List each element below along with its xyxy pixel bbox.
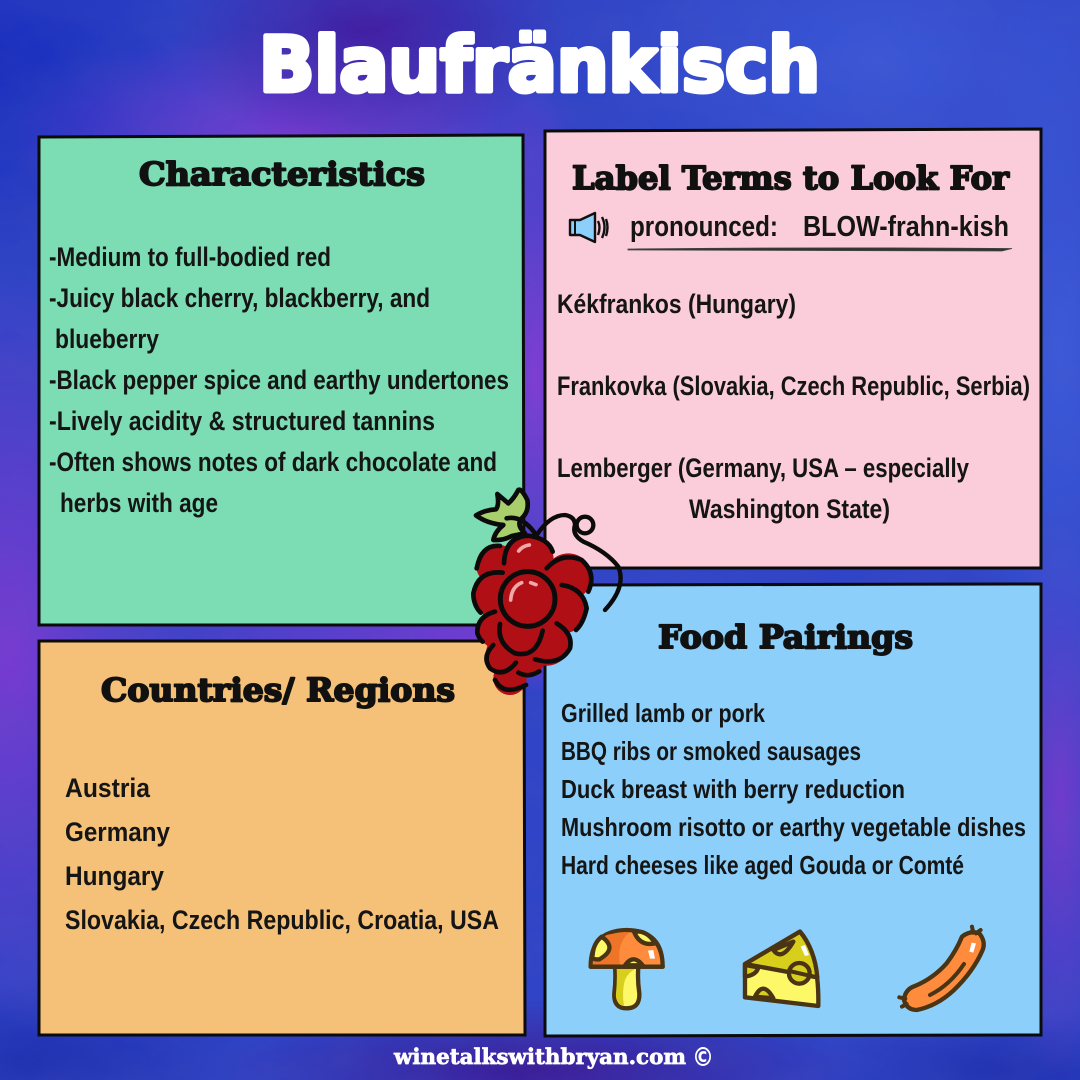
- footer credit: winetalkswithbryan.com: [393, 1044, 686, 1069]
- text block: characteristics list: [49, 242, 509, 518]
- text block: characteristics list: herbs with age: [60, 488, 218, 518]
- text block: countries list: Austria: [65, 773, 151, 803]
- grape leaf: [476, 490, 528, 540]
- heading: food pairings: Food Pairings: [658, 618, 913, 656]
- text block: food list: BBQ ribs or smoked sausages: [561, 736, 861, 766]
- heading: label terms: Label Terms to Look For: [572, 159, 1010, 197]
- text block: label terms list: Kékfrankos (Hungary): [557, 289, 796, 319]
- title: Blaufränkisch: [259, 20, 820, 109]
- icon: speaker: [570, 213, 608, 242]
- copyright symbol: ©: [692, 1043, 714, 1073]
- grape outlines: [473, 536, 591, 690]
- panel: label terms: [545, 129, 1041, 568]
- text block: countries list: Slovakia, Czech Republic, Croatia, USA: [65, 905, 499, 935]
- panel: characteristics: [39, 135, 524, 625]
- text block: label terms list: [557, 289, 1030, 524]
- underline: [628, 248, 1012, 251]
- icon: cheese: [745, 932, 818, 1006]
- text: pronunciation: BLOW-frahn-kish: [803, 211, 1009, 243]
- text block: food list: [561, 698, 1026, 880]
- text block: characteristics list: -Often shows notes of dark chocolate and: [49, 447, 497, 477]
- heading: countries: Countries/ Regions: [101, 671, 455, 709]
- icon: sausage: [899, 927, 984, 1010]
- text block: food list: Duck breast with berry reduction: [561, 774, 905, 804]
- text block: characteristics list: -Black pepper spice and earthy undertones: [49, 365, 509, 395]
- text: pronunciation: [630, 211, 1009, 243]
- icon: grape cluster: [472, 490, 621, 695]
- grape silhouette: [472, 535, 592, 695]
- vine tendril: [537, 515, 621, 610]
- text block: countries list: Hungary: [65, 861, 164, 891]
- text block: characteristics list: blueberry: [55, 324, 159, 354]
- text block: countries list: Germany: [65, 817, 170, 847]
- text block: label terms list: Washington State): [689, 494, 890, 524]
- panel: food pairings: [545, 584, 1041, 1036]
- text block: countries list: [65, 773, 499, 935]
- panel: countries and regions: [39, 641, 525, 1035]
- text block: food list: Grilled lamb or pork: [561, 698, 765, 728]
- icon: mushroom: [591, 930, 663, 1008]
- text block: food list: Hard cheeses like aged Gouda or Comté: [561, 850, 964, 880]
- text block: characteristics list: -Lively acidity & structured tannins: [49, 406, 435, 436]
- heading: characteristics: Characteristics: [139, 155, 425, 193]
- text: pronunciation: pronounced:: [630, 211, 778, 243]
- text block: characteristics list: -Medium to full-bodied red: [49, 242, 331, 272]
- text block: label terms list: Lemberger (Germany, USA – especially: [557, 453, 969, 483]
- text block: characteristics list: -Juicy black cherry, blackberry, and: [49, 283, 430, 313]
